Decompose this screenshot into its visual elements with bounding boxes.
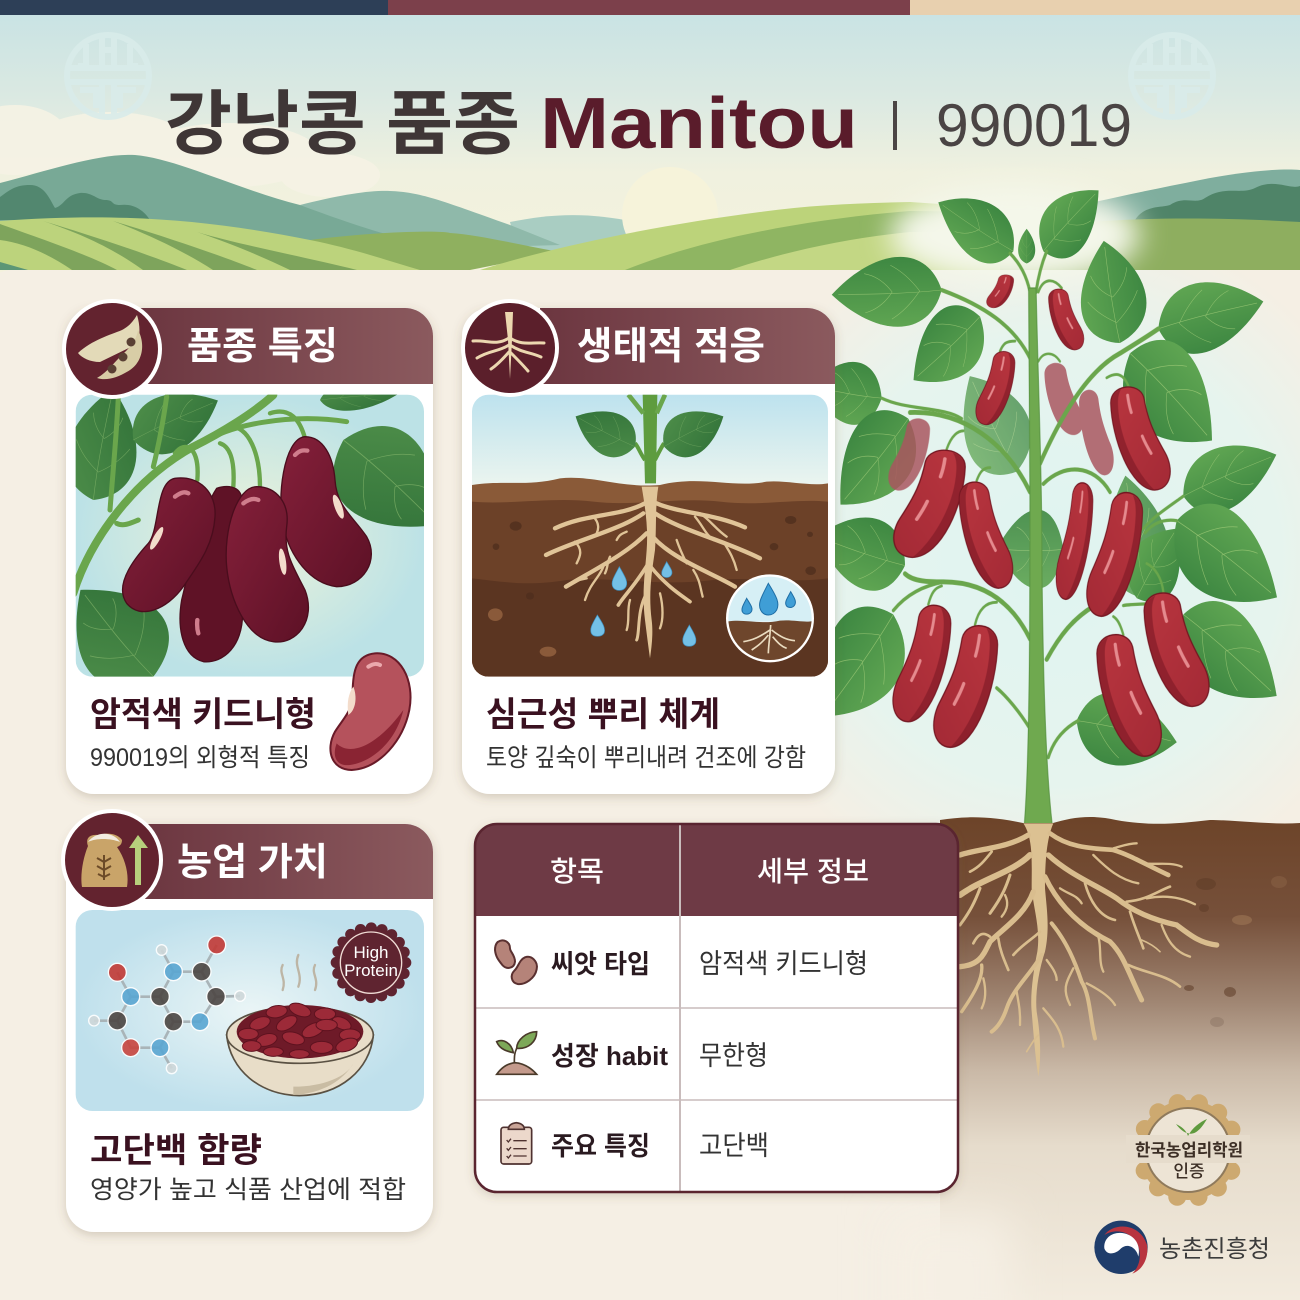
- steam: [281, 955, 316, 990]
- agency logo: [1094, 1221, 1270, 1274]
- top colour stripe: [0, 0, 1300, 15]
- card background: [66, 308, 433, 794]
- soil edge blend: [890, 1215, 1010, 1300]
- text block: 990019의 외형적 특징: [90, 744, 310, 772]
- certification seal: 한국농업리학원: [1135, 1141, 1243, 1160]
- bean photo illustration: [76, 394, 424, 771]
- badge text: Protein: [344, 961, 398, 980]
- table header: [475, 824, 958, 916]
- roots: [642, 487, 658, 658]
- icon: grain sack and arrow: [63, 811, 161, 909]
- soil ground: [940, 817, 1300, 1300]
- badge text: High: [354, 943, 388, 962]
- panel: ecological adaptation: [462, 301, 835, 794]
- plant illustration: [794, 169, 1297, 829]
- row: seed type: 씨앗 타입: [551, 949, 650, 979]
- text block: [90, 1132, 406, 1204]
- title: 강낭콩 품종: [165, 85, 520, 163]
- protein illustration: [76, 910, 424, 1111]
- row: seed type: [495, 940, 868, 984]
- stems: [882, 251, 1183, 757]
- certification seal: [1126, 1100, 1250, 1200]
- row: key trait: 주요 특징: [551, 1131, 650, 1161]
- table header labels: [550, 856, 869, 887]
- single bean: [330, 653, 411, 770]
- icon: roots: [463, 301, 557, 395]
- plant roots: [960, 823, 1217, 1077]
- water inset: [726, 574, 814, 662]
- panel: agricultural value: [63, 811, 433, 1232]
- pods: [893, 275, 1209, 756]
- card header bar: [540, 308, 835, 384]
- text block: 영양가 높고 식품 산업에 적합: [90, 1176, 406, 1204]
- plant top glow: [890, 185, 1140, 285]
- table header labels: 세부 정보: [757, 856, 869, 887]
- text block: 암적색 키드니형: [90, 696, 316, 734]
- bowl of beans: [227, 1000, 373, 1096]
- row: key trait: [501, 1123, 769, 1164]
- card background: [462, 308, 835, 794]
- card background: [66, 824, 433, 1232]
- agency logo: 농촌진흥청: [1159, 1236, 1270, 1263]
- icon: bean pod: [64, 301, 160, 397]
- row: growth habit: [497, 1032, 768, 1074]
- heading: 품종 특징: [187, 326, 338, 368]
- row: seed type: 암적색 키드니형: [699, 949, 868, 979]
- leaves: [794, 169, 1297, 778]
- title: Manitou: [540, 84, 858, 164]
- heading: 농업 가치: [177, 842, 328, 884]
- text block: 고단백 함량: [90, 1132, 262, 1170]
- clouds: [0, 105, 380, 197]
- faded background pods: [888, 363, 1114, 491]
- heading: 생태적 적응: [577, 326, 765, 368]
- soil pebbles: [1184, 876, 1287, 1027]
- row: key trait: 고단백: [699, 1131, 769, 1161]
- certification seal: 인증: [1173, 1162, 1205, 1181]
- row: growth habit: 무한형: [699, 1041, 768, 1071]
- card header bar: [140, 308, 433, 384]
- data table: [475, 824, 958, 1192]
- molecule: [89, 936, 245, 1074]
- panel: variety traits: [46, 301, 469, 794]
- title: [165, 84, 1132, 164]
- beans cluster: [123, 437, 371, 662]
- text block: 심근성 뿌리 체계: [486, 696, 720, 734]
- table header labels: 항목: [550, 856, 604, 887]
- text block: [90, 696, 316, 772]
- landscape hills: [0, 155, 1300, 270]
- badge: high protein: [335, 927, 407, 999]
- table background: [475, 824, 958, 1192]
- plant background tint: [700, 270, 1300, 840]
- badge text: [344, 943, 398, 980]
- main stem: [1024, 288, 1053, 829]
- left ornament: [67, 35, 149, 117]
- background sky: [0, 0, 1300, 280]
- title: 990019: [936, 92, 1132, 159]
- row: growth habit: 성장 habit: [551, 1041, 668, 1071]
- card header bar: [140, 824, 433, 899]
- root system illustration: [472, 395, 828, 677]
- text block: 토양 깊숙이 뿌리내려 건조에 강함: [486, 744, 806, 772]
- main cream panel: [0, 270, 1300, 1300]
- text block: [486, 696, 806, 772]
- right ornament: [1131, 35, 1213, 117]
